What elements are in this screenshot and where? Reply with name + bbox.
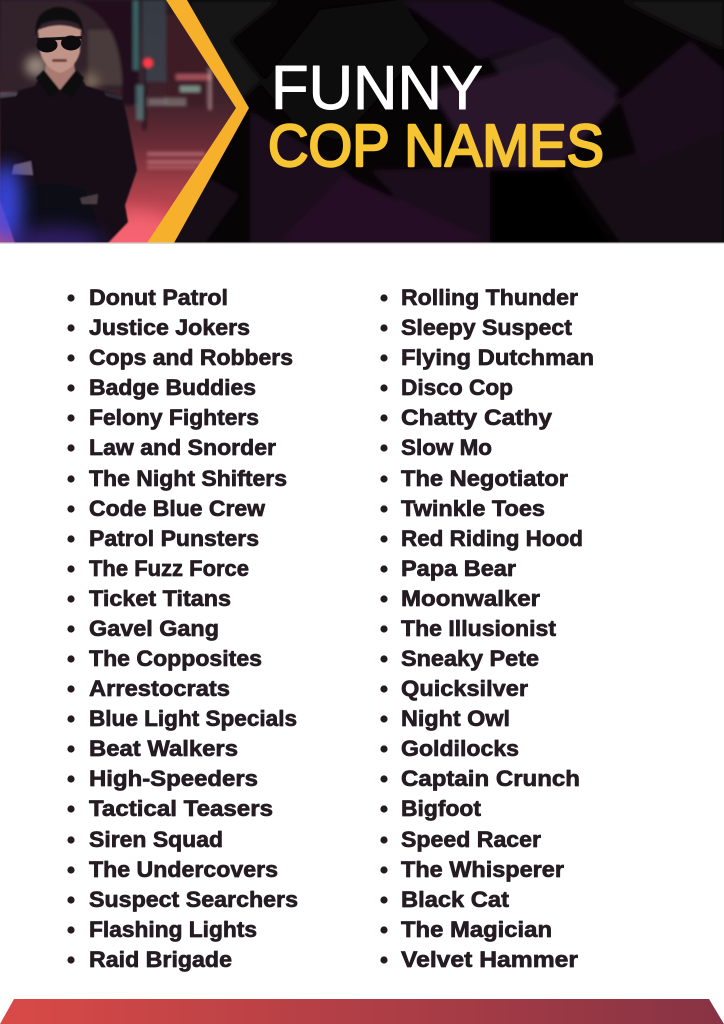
list: right column of names: The Whisperer bbox=[401, 857, 564, 882]
blue police light glow bbox=[0, 163, 22, 247]
list: left column of names: Raid Brigade bbox=[89, 947, 232, 972]
red ground glow bbox=[108, 202, 168, 242]
list: right column of names: The Magician bbox=[401, 917, 552, 942]
sunglasses bbox=[36, 36, 82, 52]
list: right column of names: Speed Racer bbox=[401, 827, 541, 852]
list: right column of names: Sneaky Pete bbox=[401, 646, 539, 671]
mouth bbox=[52, 59, 67, 62]
list: right column of names: Rolling Thunder bbox=[401, 285, 578, 310]
list: left column of names: Blue Light Specials bbox=[89, 706, 297, 731]
list: right column of names: Quicksilver bbox=[401, 676, 528, 701]
dark geometric background bbox=[170, 0, 724, 243]
police officer photo bbox=[0, 0, 236, 242]
title bbox=[270, 66, 602, 168]
list: left column of names bbox=[67, 285, 298, 972]
list: left column of names: The Night Shifters bbox=[89, 466, 287, 491]
list: left column of names: Cops and Robbers bbox=[89, 345, 293, 370]
list: right column of names: Chatty Cathy bbox=[401, 405, 553, 430]
list: left column of names: Suspect Searchers bbox=[89, 887, 298, 912]
list: right column of names: Sleepy Suspect bbox=[401, 315, 573, 340]
list: left column of names: Beat Walkers bbox=[89, 736, 238, 761]
list: left column of names: Gavel Gang bbox=[89, 616, 219, 641]
header banner bbox=[0, 0, 724, 266]
footer gradient bar bbox=[0, 999, 724, 1024]
list: left column of names: Tactical Teasers bbox=[89, 796, 273, 821]
list: left column of names: Felony Fighters bbox=[89, 405, 259, 430]
officer figure bbox=[0, 7, 137, 243]
list: left column of names: High-Speeders bbox=[89, 766, 258, 791]
list: right column of names bbox=[380, 285, 594, 972]
list: right column of names: Velvet Hammer bbox=[401, 947, 578, 972]
list: right column of names: The Illusionist bbox=[401, 616, 557, 641]
purple bottom glow bbox=[4, 216, 112, 242]
list: left column of names: The Copposites bbox=[89, 646, 262, 671]
list: left column of names: The Undercovers bbox=[89, 857, 278, 882]
title line: cop names: COP NAMES bbox=[268, 113, 604, 179]
list: right column of names: The Negotiator bbox=[401, 466, 568, 491]
list: right column of names: Night Owl bbox=[401, 706, 510, 731]
yellow chevron bbox=[147, 0, 249, 243]
list: right column of names: Red Riding Hood bbox=[401, 526, 583, 551]
list: left column of names: Badge Buddies bbox=[89, 375, 256, 400]
list: left column of names: Ticket Titans bbox=[89, 586, 231, 611]
list: right column of names: Bigfoot bbox=[401, 796, 482, 821]
neck bbox=[44, 62, 76, 90]
list: left column of names: Patrol Punsters bbox=[89, 526, 259, 551]
list: right column of names: Captain Crunch bbox=[401, 766, 580, 791]
list: left column of names: Justice Jokers bbox=[89, 315, 250, 340]
lamp glow bbox=[25, 55, 47, 77]
list: right column of names: Papa Bear bbox=[401, 556, 516, 581]
list: right column of names: Black Cat bbox=[401, 887, 510, 912]
list: right column of names: Goldilocks bbox=[401, 736, 519, 761]
traffic light bbox=[142, 58, 154, 68]
list: left column of names: Donut Patrol bbox=[89, 285, 228, 310]
list: left column of names: Arrestocrats bbox=[89, 676, 230, 701]
list: left column of names: Law and Snorder bbox=[89, 435, 276, 460]
list: left column of names: Siren Squad bbox=[89, 827, 223, 852]
list: left column of names: Flashing Lights bbox=[89, 917, 257, 942]
list: right column of names: Flying Dutchman bbox=[401, 345, 594, 370]
title line: funny: FUNNY bbox=[271, 54, 483, 123]
list: right column of names: Slow Mo bbox=[401, 435, 492, 460]
city buildings bbox=[0, 0, 212, 169]
list: left column of names: Code Blue Crew bbox=[89, 496, 266, 521]
list: right column of names: Disco Cop bbox=[401, 375, 513, 400]
list: left column of names: The Fuzz Force bbox=[89, 556, 249, 581]
face bbox=[38, 25, 81, 73]
list: right column of names: Twinkle Toes bbox=[401, 496, 545, 521]
hair bbox=[36, 7, 83, 36]
list: right column of names: Moonwalker bbox=[401, 586, 540, 611]
